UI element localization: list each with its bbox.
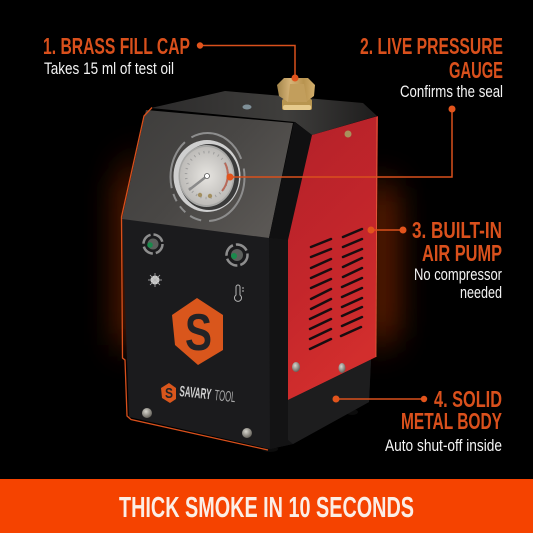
callout 4 text: Auto shut-off inside	[385, 437, 502, 455]
front upper panel	[122, 110, 293, 238]
brand mark: TOOL	[214, 387, 236, 406]
callout 1 heading: 1. BRASS FILL CAP	[43, 33, 190, 59]
red side panel	[288, 116, 378, 400]
right indicator light	[226, 244, 248, 266]
brand mark: S	[165, 385, 173, 402]
callout 4 connector	[332, 396, 427, 402]
hexagon S logo: S	[185, 304, 212, 362]
callout 2 text: Confirms the seal	[400, 83, 503, 101]
icon: thermometer	[235, 285, 244, 301]
callout 1 connector	[197, 42, 298, 82]
vents	[310, 229, 362, 349]
left indicator light	[144, 234, 162, 254]
callout 1 text: Takes 15 ml of test oil	[44, 60, 174, 78]
callout 3 heading line 2: AIR PUMP	[422, 240, 502, 266]
hexagon S logo	[172, 298, 223, 365]
bottom banner	[0, 479, 533, 533]
callout 2 connector	[226, 106, 456, 180]
background glow	[122, 150, 392, 350]
callout 4 heading line 1: 4. SOLID	[434, 386, 502, 412]
red panel edge highlight	[376, 117, 377, 357]
front lower panel	[122, 122, 371, 449]
callout 3 text line 1: No compressor	[414, 266, 502, 284]
top screw	[242, 104, 252, 110]
callout 3 heading line 1: 3. BUILT-IN	[412, 217, 502, 243]
orange rim of front panel	[122, 108, 268, 450]
smoke machine product	[122, 78, 378, 452]
callout 2 heading line 2: GAUGE	[449, 57, 503, 83]
brass fill cap	[277, 78, 315, 110]
front column shading	[269, 238, 293, 449]
base	[288, 360, 371, 444]
top face	[151, 91, 377, 135]
machine feet	[262, 409, 358, 452]
pressure gauge	[170, 133, 244, 221]
callout 3 text line 2: needed	[460, 284, 502, 302]
icon: sun	[148, 273, 162, 287]
screws	[142, 130, 352, 438]
callout 3 connector	[368, 226, 406, 234]
brand mark: SAVARY	[179, 383, 212, 403]
side chamfer	[269, 122, 312, 240]
